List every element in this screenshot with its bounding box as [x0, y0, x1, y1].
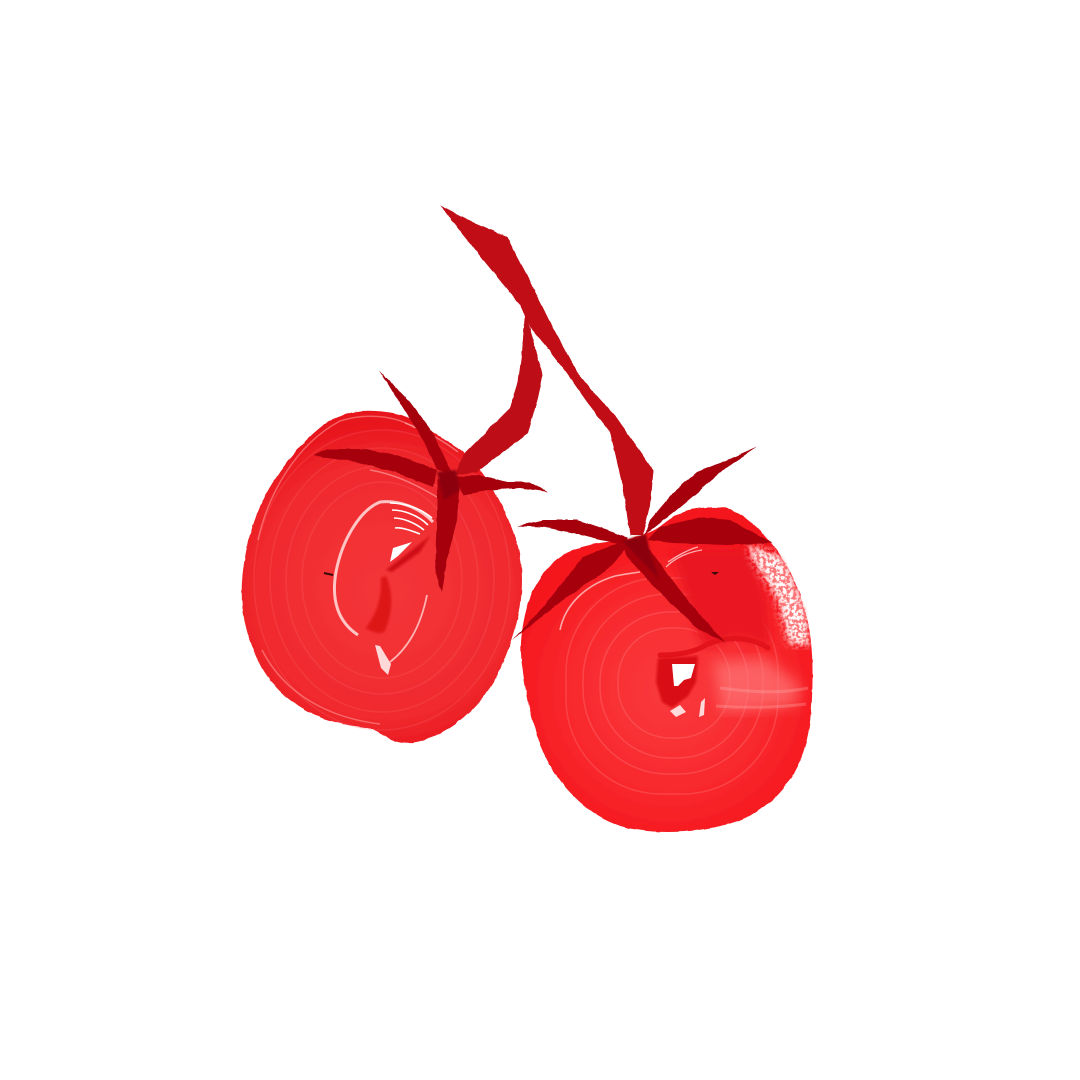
- right tomato rim highlight: [560, 572, 640, 630]
- left calyx top sepal: [379, 370, 453, 475]
- right tomato ridge band: [660, 639, 768, 655]
- left tomato inner fold: [366, 576, 391, 633]
- right tomato centre hollow: [656, 656, 698, 708]
- right calyx: [513, 447, 773, 643]
- right calyx upper-right sepal: [645, 447, 757, 535]
- left tomato lower ring: [390, 595, 427, 662]
- left calyx: [313, 370, 548, 592]
- right tomato upper streaks: [666, 547, 702, 567]
- right tomato body: [521, 507, 813, 832]
- left calyx right sepal: [455, 475, 548, 495]
- right tomato dark upper patch: [672, 549, 770, 648]
- right tomato horizontal brush streaks: [716, 688, 808, 707]
- vine stem: [440, 205, 653, 535]
- right calyx lower-left sepal: [513, 542, 627, 640]
- left tomato: [242, 411, 522, 743]
- left tomato seed mark: [324, 573, 333, 575]
- right calyx left sepal: [517, 520, 627, 545]
- left tomato white patch: [390, 542, 412, 562]
- left tomato lower highlight: [375, 645, 391, 675]
- left calyx left sepal: [313, 449, 437, 487]
- right tomato dry-brush base: [747, 545, 809, 645]
- right tomato lower highlights: [670, 698, 705, 717]
- left tomato core brush strokes: [390, 503, 432, 534]
- left tomato core ring: [334, 502, 433, 635]
- left branch: [455, 313, 543, 475]
- left calyx lower sepal: [435, 478, 460, 592]
- left tomato body: [242, 411, 522, 743]
- right tomato dry-brush speckle: [747, 545, 809, 645]
- right calyx dark centre: [622, 534, 660, 580]
- right tomato: [521, 507, 813, 832]
- left tomato rim highlight: [258, 416, 415, 724]
- left calyx dark centre: [437, 470, 460, 500]
- right calyx right sepal: [647, 517, 773, 545]
- right tomato seed mark: [711, 572, 719, 575]
- left tomato concentric brush rings: [254, 430, 510, 730]
- right calyx lower-right sepal: [623, 540, 725, 643]
- left tomato upper brush marks: [370, 423, 458, 497]
- right tomato centre white patch: [672, 664, 695, 686]
- right tomato light wash: [712, 658, 800, 712]
- left tomato dark streak: [386, 536, 430, 572]
- right tomato concentric brush rings: [566, 578, 778, 794]
